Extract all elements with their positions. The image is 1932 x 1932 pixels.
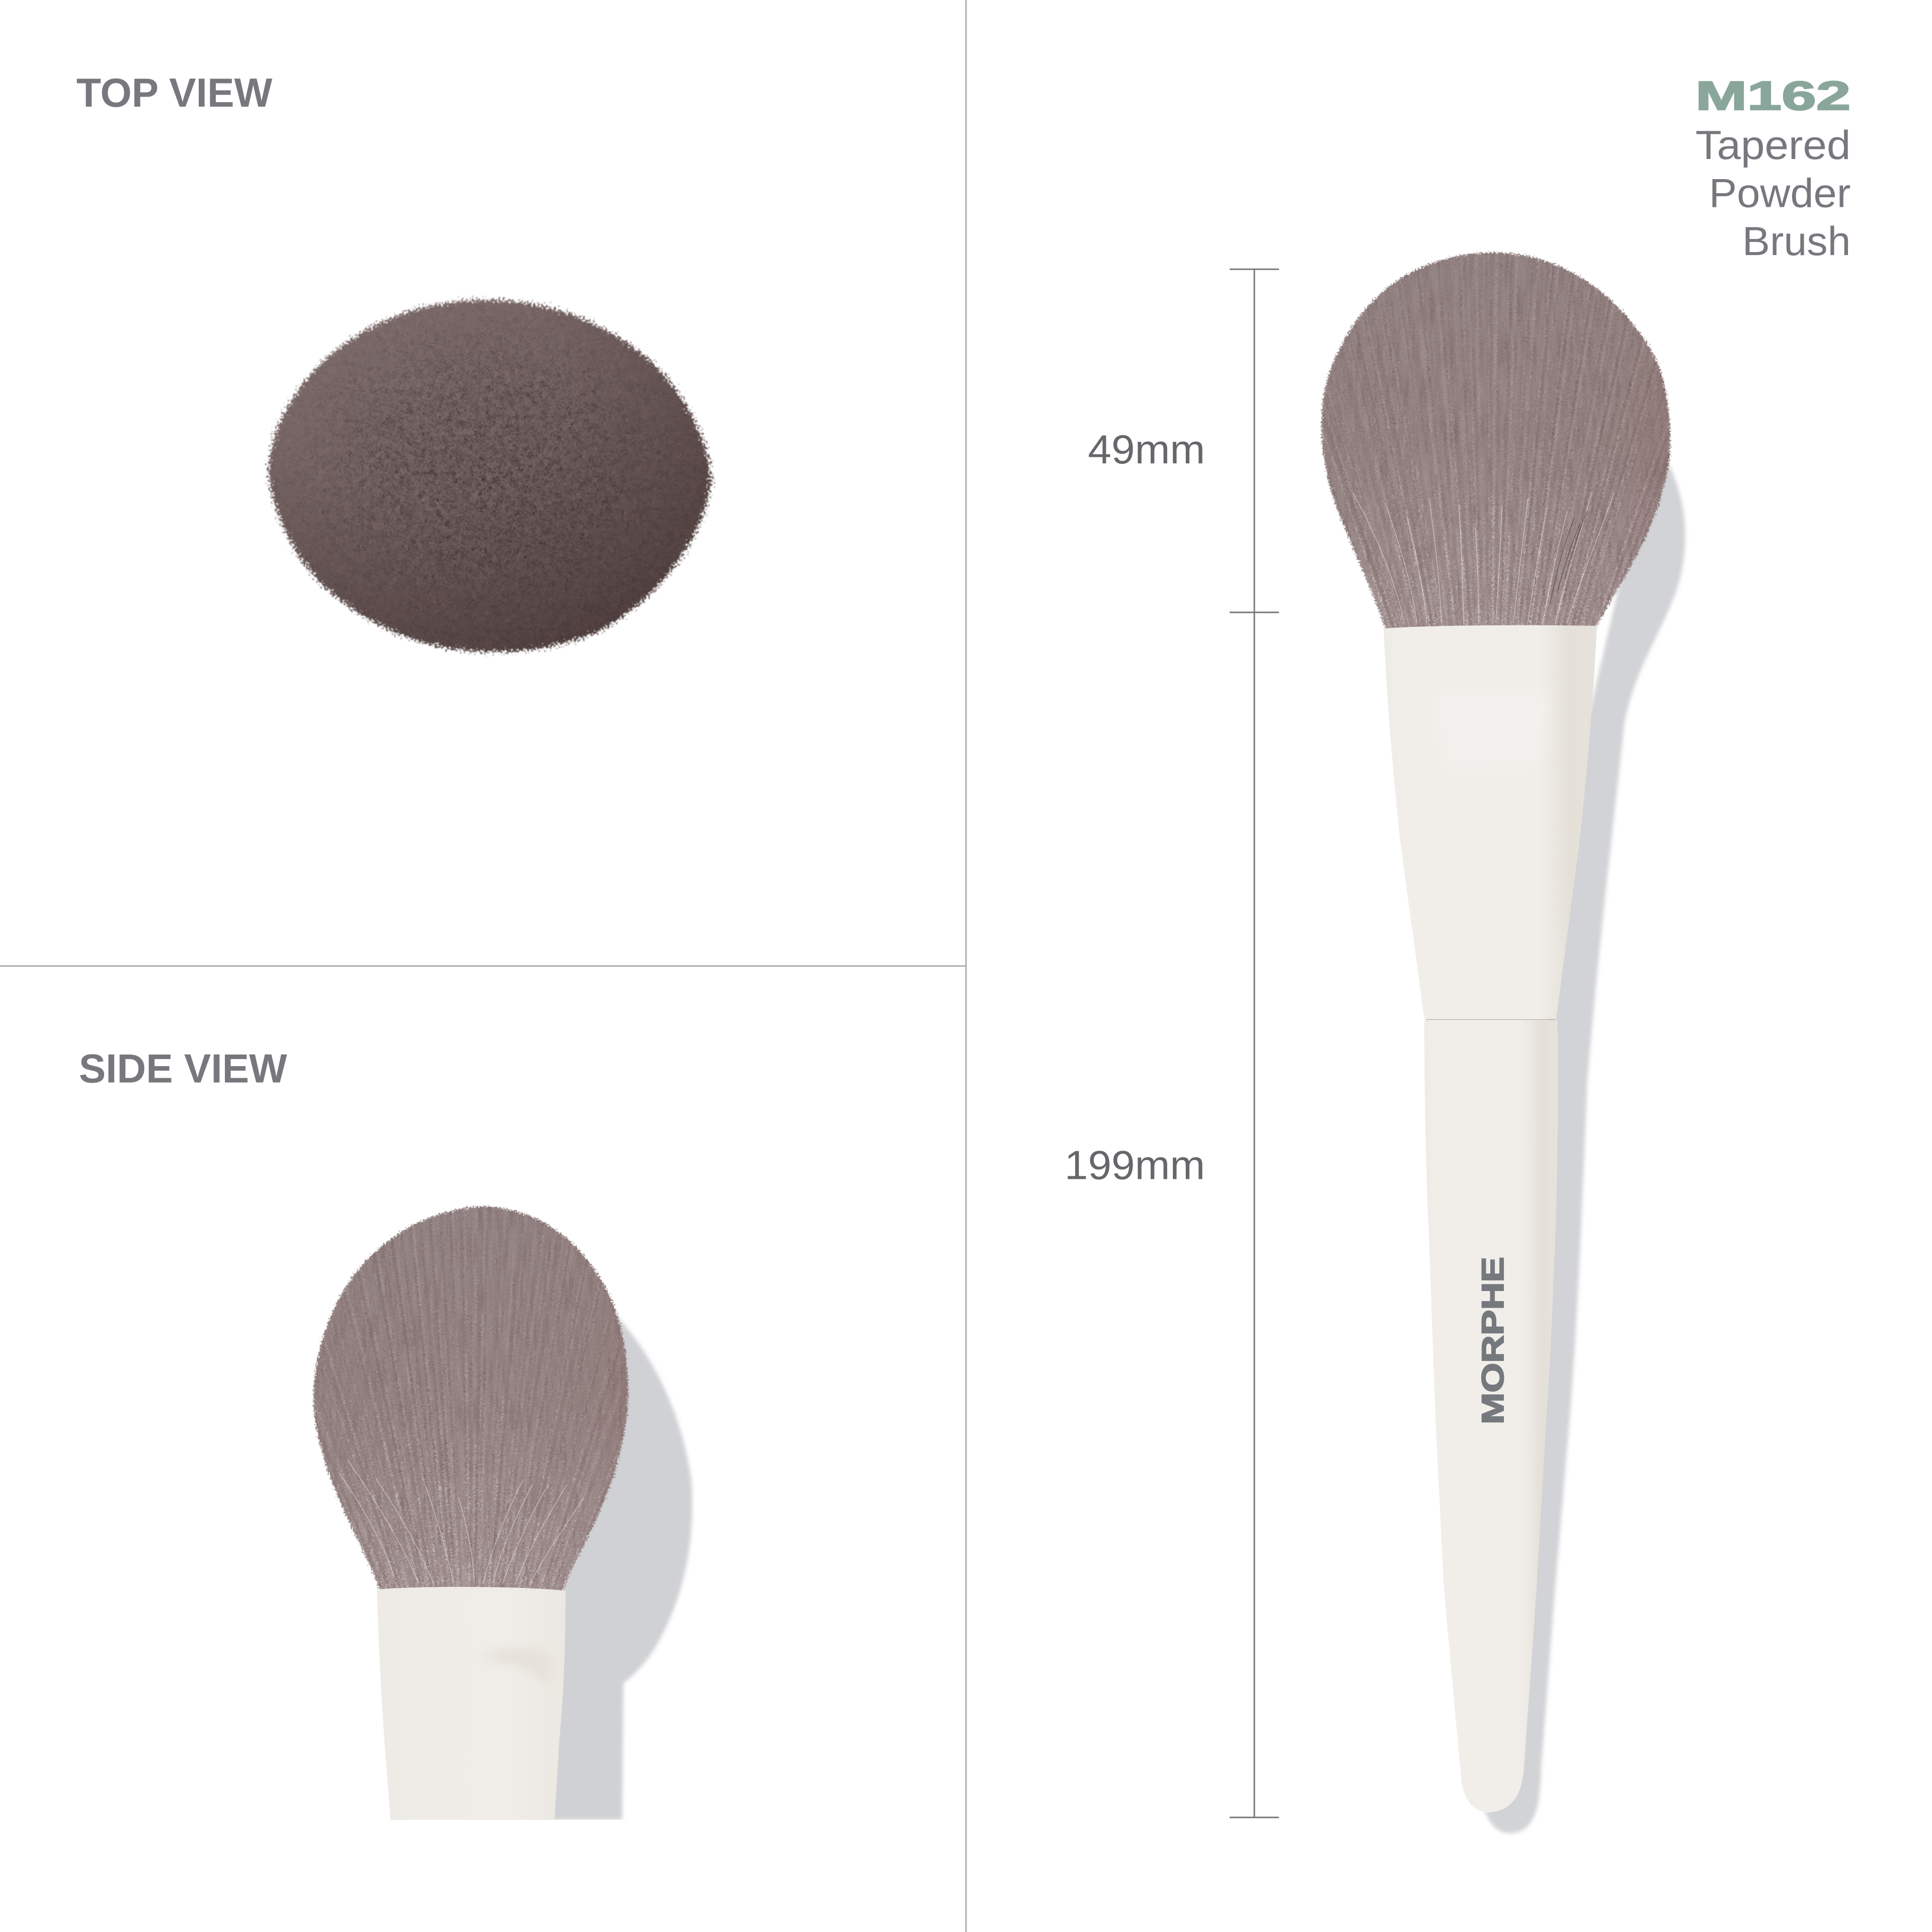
bristles: side view: [312, 1204, 630, 1591]
bristles: full brush: [1318, 251, 1673, 630]
image: brush top view: [269, 300, 711, 652]
shadow: side view: [542, 1300, 692, 1820]
strands: full brush: [1353, 493, 1614, 623]
product title: M162: [1696, 73, 1850, 119]
product title: Powder: [1709, 171, 1850, 216]
image: full brush: [1318, 251, 1687, 1835]
product title: [1696, 73, 1850, 264]
ferrule highlight: [1435, 694, 1550, 766]
product title: Tapered: [1696, 123, 1850, 168]
panel dividers: [0, 0, 966, 1932]
shadow: full brush: [1485, 437, 1685, 1833]
logo: MORPHE: MORPHE: [1476, 1257, 1510, 1424]
ferrule: side view: [377, 1587, 566, 1820]
heading: top view: TOP VIEW: [76, 70, 273, 116]
dark strands: [1550, 511, 1587, 604]
ferrule dent: [493, 1649, 546, 1673]
seam: [1425, 1019, 1555, 1020]
strands: side view: [339, 1460, 584, 1584]
image: brush side view: [312, 1204, 694, 1820]
ferrule: full brush: [1384, 625, 1597, 1019]
label: 49mm: 49mm: [1088, 427, 1205, 472]
handle: [1424, 1020, 1558, 1812]
heading: side view: SIDE VIEW: [79, 1046, 287, 1091]
dimension scale: [1230, 269, 1279, 1817]
product title: Brush: [1742, 219, 1850, 264]
label: 199mm: 199mm: [1065, 1143, 1205, 1188]
